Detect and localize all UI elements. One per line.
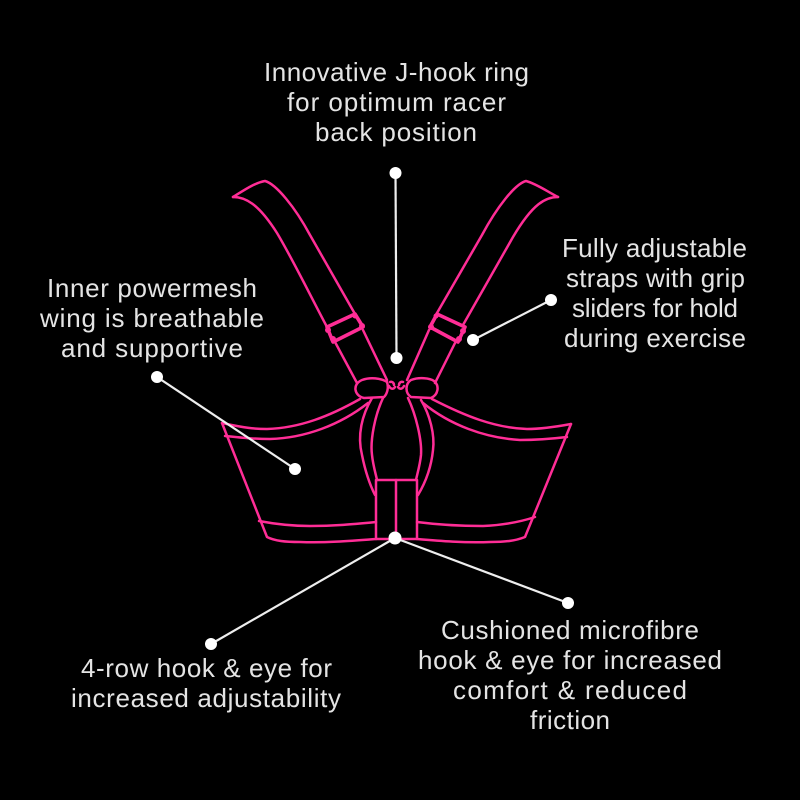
callout heading: J-hook ring bbox=[264, 57, 529, 147]
shared pointer dot: hook and eye bbox=[388, 532, 402, 544]
callout heading: J-hook ring: Innovative J-hook ring bbox=[264, 57, 529, 87]
callout text: 4-row hook and eye: increased adjustability bbox=[71, 683, 341, 713]
callout text: cushioned microfibre: hook & eye for increased bbox=[418, 645, 722, 675]
callout text: powermesh wing: Inner powermesh bbox=[47, 273, 257, 303]
callout text: adjustable straps: during exercise bbox=[564, 323, 746, 353]
hook and eye panel bbox=[376, 480, 417, 539]
callout text: 4-row hook and eye: 4-row hook & eye for bbox=[81, 653, 332, 683]
callout text: adjustable straps: straps with grip bbox=[566, 263, 745, 293]
callout text: powermesh wing bbox=[39, 273, 264, 363]
callout text: 4-row hook and eye bbox=[71, 653, 341, 713]
callout: adjustable straps bbox=[467, 233, 747, 353]
callout text: cushioned microfibre bbox=[418, 615, 722, 735]
callout: powermesh wing bbox=[39, 273, 301, 475]
callout text: powermesh wing: and supportive bbox=[61, 333, 243, 363]
left strap bbox=[233, 181, 387, 383]
callout text: cushioned microfibre: friction bbox=[530, 705, 610, 735]
callout: 4-row hook and eye bbox=[71, 538, 395, 713]
callout text: powermesh wing: wing is breathable bbox=[39, 303, 264, 333]
callout text: adjustable straps: sliders for hold bbox=[572, 293, 738, 323]
pointer: J-hook ring bbox=[390, 167, 402, 364]
pointer: cushioned microfibre bbox=[395, 538, 574, 609]
callout text: cushioned microfibre: comfort & reduced bbox=[453, 675, 687, 705]
callout heading: J-hook ring: back position bbox=[315, 117, 477, 147]
callout text: adjustable straps bbox=[562, 233, 747, 353]
bra diagram bbox=[222, 181, 571, 542]
pointer: powermesh wing bbox=[151, 371, 301, 475]
callout: cushioned microfibre bbox=[395, 538, 722, 735]
left cup bbox=[222, 399, 376, 542]
callout heading: J-hook ring: for optimum racer bbox=[287, 87, 506, 117]
callout text: cushioned microfibre: Cushioned microfibre bbox=[441, 615, 699, 645]
callout: J-hook ring bbox=[264, 57, 529, 364]
pointer: 4-row hook and eye bbox=[205, 538, 395, 650]
pointer: adjustable straps bbox=[467, 294, 557, 346]
centre gore bbox=[360, 398, 433, 495]
right strap bbox=[407, 181, 558, 383]
callout text: adjustable straps: Fully adjustable bbox=[562, 233, 747, 263]
right cup bbox=[417, 399, 571, 542]
J-hook rings bbox=[355, 378, 438, 398]
